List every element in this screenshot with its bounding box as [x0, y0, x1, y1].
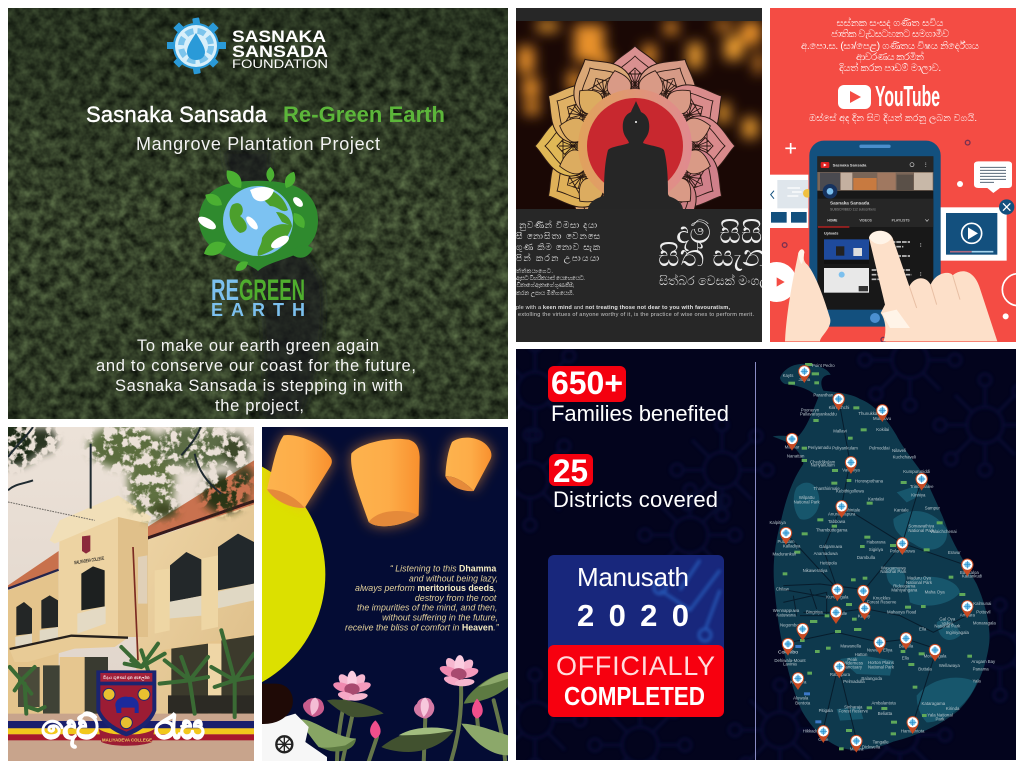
heading [659, 219, 762, 271]
quote: and without being lazy, [409, 573, 498, 583]
icon: Re-Green Earth globe emblem [196, 166, 318, 273]
panel background [516, 349, 1016, 760]
english translation: ple with a keen mind and not treating those not dear to you with favouratism, [516, 305, 730, 311]
place labels: Somawathiya [908, 524, 935, 529]
place labels: Inginiyagala [946, 630, 969, 635]
icon: YouTube logo: YouTube [875, 81, 940, 113]
icon: YouTube logo [838, 85, 940, 109]
icon: dharma wheel [276, 736, 292, 752]
place labels: Tabbowa [828, 519, 846, 524]
place labels: Maduru Oya [907, 576, 931, 581]
place labels: Forest Reserve [867, 600, 897, 605]
tree canopy [0, 420, 253, 520]
place labels: Mahiyangana [891, 587, 918, 592]
place labels: Negombo [780, 623, 799, 628]
national parks [794, 483, 977, 722]
place labels: Monaragala [924, 653, 947, 658]
place labels: Thambuttegama [816, 527, 848, 532]
icon: play bubble [770, 262, 794, 302]
place labels: National Park [794, 499, 820, 504]
place labels: Pelmadulla [843, 679, 865, 684]
verse translation: ත්ත්කයාගෙට. [516, 268, 553, 275]
college crest: විද්‍යා ගුණෝ දාන ආලෝක [103, 675, 151, 681]
verse text: ගුණ කිම නොව සැක [516, 242, 601, 252]
place labels: Galgamuwa [819, 544, 843, 549]
palms and plants [10, 630, 254, 717]
phone: SUBSCRIBED 112 subscribers [830, 208, 876, 212]
badge: Manusath 2020: 2020 [577, 598, 689, 633]
place labels: Neriyakulam [811, 462, 835, 467]
icon: water-drop wheel [167, 17, 226, 74]
place labels: Kalladiya [783, 544, 801, 549]
sinhala intro text: ආවරණය කරමින් [856, 50, 924, 63]
place labels: Habarana [866, 540, 886, 545]
college crest: MALIYADEVA COLLEGE [102, 738, 153, 744]
place labels: Rideegama [893, 584, 916, 589]
title: Sasnaka Sansada [86, 102, 268, 127]
flag band [8, 721, 255, 740]
badge: officially completed: OFFICIALLY [556, 651, 715, 681]
place labels: Maha Oya [925, 590, 945, 595]
monk head and robe [259, 684, 327, 761]
panel background [770, 8, 1016, 342]
verse text: පින් කරන උපායයා [516, 253, 599, 264]
place labels: Knuckles [873, 595, 890, 600]
place labels: Sanctuary [843, 664, 863, 669]
title text: රැස [155, 710, 205, 747]
quote [345, 563, 500, 632]
place labels: Wilpattu [799, 495, 815, 500]
place labels: Yala National [927, 713, 953, 718]
stat: 25 districts [549, 453, 718, 512]
place labels: Nilaveli [892, 448, 906, 453]
place labels: Kinniya [911, 492, 926, 497]
place labels: Kalpitiya [769, 520, 786, 525]
Buddha silhouette [588, 101, 683, 209]
urna dot [635, 121, 637, 123]
place labels: Mallavi [833, 428, 847, 433]
place labels: Kataragama [922, 701, 946, 706]
verse text [516, 220, 601, 264]
yellow disc [79, 451, 325, 698]
logo wordmark: SANSADA [232, 43, 328, 61]
phone: Sasnaka Sansada [830, 201, 870, 206]
place labels: Pallavarayankaddu [800, 411, 837, 416]
body text: To make our earth green again [137, 337, 379, 355]
place labels: Anuradhapura [828, 512, 856, 517]
body text: the project, [215, 397, 304, 415]
badge: officially completed: COMPLETED [564, 681, 705, 711]
place labels: National Park [906, 580, 933, 585]
english translation [516, 305, 754, 318]
college sign: MALIYADEVA COLLEGE [74, 556, 105, 566]
place labels: Kalmunai [973, 601, 991, 606]
place labels: Galle [818, 737, 829, 742]
phone: Sasnaka Sansada [833, 163, 867, 168]
college crest [96, 670, 156, 746]
place labels: Wilderness [842, 661, 863, 666]
subtitle: Mangrove Plantation Project [136, 134, 380, 154]
place labels: Ampara [960, 613, 976, 618]
place labels: Gal Oya [939, 617, 956, 622]
english translation: extolling the virtues of anyone worthy of it, is the practice of wise ones to perform merit. [518, 312, 754, 318]
place labels: Hikkaduwa [803, 728, 825, 733]
logo text: RE GREEN EARTH [212, 279, 304, 316]
verse translation: ඩිතාගේ ඇතාගේ ගුණ කිම, [517, 282, 575, 289]
place labels: Beliatta [878, 711, 893, 716]
place labels: Hatton [855, 652, 868, 657]
verse text: නුවණින් විමසා දයා [519, 220, 597, 231]
place labels: Katuwana [776, 613, 796, 618]
place labels: Panama [973, 667, 989, 672]
panel: Dhamma quote with lanterns [79, 427, 508, 764]
place labels: Polonnaruwa [890, 549, 916, 554]
phone: PLAYLISTS [892, 218, 910, 222]
sky [8, 427, 255, 761]
place labels: Horowpothana [855, 478, 884, 483]
place labels: Batticaloa [960, 570, 979, 575]
place labels: Forest Reserve [839, 709, 869, 714]
place labels: Kumpurupiddi [903, 469, 930, 474]
place labels: Kebithigollewa [836, 489, 865, 494]
place labels: Kuchchaveli [893, 455, 916, 460]
sinhala channel text: ඔස්සේ අද දින සිට දියත් කරනු ලබන වගයි. [809, 111, 977, 124]
body text [96, 337, 416, 415]
logo text: RE GREEN EARTH: RE [211, 274, 239, 307]
map of Sri Lanka [769, 363, 996, 753]
verse text: සී නොසිතා වෙනසෙ [516, 231, 601, 241]
place labels: National Park [880, 569, 907, 574]
place labels: Ella [902, 656, 910, 661]
blurred lantern photo [516, 21, 762, 209]
badge: Manusath 2020 [548, 555, 724, 655]
place labels: Yala [972, 679, 981, 684]
quote: “ Listening to this Dhamma [390, 563, 496, 573]
phone: VIDEOS [859, 218, 873, 222]
place labels: Dambulla [857, 555, 876, 560]
place labels: Kirinda [946, 706, 960, 711]
place labels: Arugam Bay [971, 659, 996, 664]
forest aerial photo background [8, 8, 508, 419]
panel: Re-Green Earth mangrove project [8, 8, 508, 419]
place labels: Thanthirimale [814, 486, 840, 491]
place labels: Trincomalee [910, 484, 934, 489]
place labels: Kattankudi [962, 574, 982, 579]
place labels [769, 363, 996, 751]
mandala [534, 46, 736, 209]
logo wordmark [232, 30, 328, 68]
place labels: Kurunegala [826, 595, 849, 600]
hands [785, 231, 997, 341]
place labels: Valaichchenai [930, 529, 957, 534]
place labels: Wellawaya [939, 663, 960, 668]
place labels: Puttalam [777, 539, 795, 544]
badge: Manusath 2020: Manusath [577, 562, 689, 592]
place labels: Pooneryn [801, 408, 820, 413]
sinhala intro text: සස්නක සංසද ගණිත සවිය [836, 16, 944, 29]
panel background [516, 8, 762, 342]
place labels: Matara [850, 746, 864, 751]
place labels: Horton Plains [868, 660, 894, 665]
location pins [780, 365, 973, 753]
sky lanterns [267, 435, 491, 526]
phone: HOME [827, 218, 838, 222]
place labels: Kalutara [790, 679, 807, 684]
place labels: Badulla [899, 643, 914, 648]
place labels: Aluwala [793, 695, 809, 700]
place labels: Peak [847, 657, 858, 662]
card: left weather card [770, 174, 810, 228]
quote: without suffering in the future, [382, 613, 498, 623]
place labels: Eravur [948, 550, 961, 555]
place labels: Nikaweratiya [803, 568, 828, 573]
place labels: Ratnapura [830, 672, 851, 677]
place labels: Ella [919, 626, 927, 631]
place labels: Madurankuli [773, 552, 796, 557]
place labels: Pulmoddai [869, 446, 890, 451]
card: video player [937, 199, 1014, 261]
title text: දෙව් [41, 710, 99, 749]
body text: and to conserve our coast for the future, [96, 357, 416, 375]
place labels: Mannar [785, 444, 800, 449]
quote: receive the bliss of comfort in Heaven.” [345, 622, 500, 632]
place labels: Kokilai [876, 427, 889, 432]
place labels: Ambalantota [872, 701, 896, 706]
sinhala intro text: ජාතික වැඩසටහනට සමගාමීව [831, 29, 949, 40]
ground [8, 714, 255, 761]
place labels: National Park [908, 528, 935, 533]
heading: දම් සිසිල් [676, 217, 785, 251]
place labels: Periyamadu [808, 445, 831, 450]
sub-heading: සිත්බර වෙසක් මංගල්‍යයක් [659, 273, 795, 289]
panel: Dharma Vesak greeting [516, 8, 762, 342]
virus background decoration [516, 349, 1016, 760]
place labels: Kegalle [833, 611, 848, 616]
panel: YouTube lessons [757, 8, 1024, 342]
stat: 25 districts: 25 [553, 453, 588, 489]
panel background [262, 427, 508, 761]
place labels: Pottuvil [976, 609, 990, 614]
building [8, 460, 254, 720]
place labels: Balangoda [861, 676, 883, 681]
island landmass [773, 364, 990, 750]
place labels: Kilinochchi [829, 405, 849, 410]
body text: Sasnaka Sansada is stepping in with [115, 377, 403, 395]
panel: Maliyadeva College [0, 420, 255, 761]
logo: Sasnaka Sansada Foundation [167, 17, 328, 74]
place labels: Mihintale [843, 507, 861, 512]
badge: officially completed [548, 645, 724, 717]
place labels: Park [936, 716, 945, 721]
quote: destroy from the root [415, 593, 497, 603]
sinhala intro text [801, 16, 979, 74]
stat: 650+ families: Families benefited [551, 401, 729, 426]
place labels: Anamaduwa [814, 551, 838, 556]
place labels: Wennappuwa [773, 608, 800, 613]
place labels: Bingiriya [806, 609, 823, 614]
stat: 650+ families: 650+ [551, 365, 623, 401]
lotus plants [299, 654, 508, 764]
sinhala intro text: දියත් කරන පාඩම් මාලාව. [839, 61, 941, 74]
divider [754, 362, 756, 760]
place labels: Kayts [783, 373, 793, 378]
sinhala intro text: අ.පො.ස. (සා/පෙළ) ගණිතය විෂය නිර්දේශය [801, 39, 979, 52]
place labels: Thunukkai [858, 411, 878, 416]
title [86, 106, 444, 122]
place labels: Lavinia [783, 662, 797, 667]
place labels: National Park [934, 624, 961, 629]
place labels: Hettipola [820, 560, 837, 565]
stat: 650+ families [548, 365, 729, 426]
phone: Uploads [824, 232, 838, 236]
logo text: RE GREEN EARTH: EARTH [211, 300, 305, 320]
quote: the impurities of the mind, and then, [357, 603, 497, 613]
place labels: Sinharaja [844, 705, 863, 710]
road network [780, 399, 967, 741]
place labels: Hambantota [901, 728, 925, 733]
verse translation: කරන උපාය මිතිගයෙහි. [516, 290, 574, 297]
place labels: Jaffna [798, 377, 811, 382]
place labels: Vavuniya [842, 468, 860, 473]
place labels: Mullaitivu [873, 416, 892, 421]
place labels: Kantale [894, 508, 909, 513]
place labels: Sigiriya [869, 547, 884, 552]
logo wordmark: FOUNDATION [232, 57, 328, 71]
place labels: Colombo [778, 650, 798, 656]
panel: Manusath 2020 [479, 309, 1024, 768]
place labels: Dickwella [862, 745, 881, 750]
speech bubble [974, 161, 1012, 193]
place labels: Cheddikulam [810, 459, 836, 464]
college sign [74, 535, 105, 566]
place labels: Dehiwala-Mount [774, 658, 806, 663]
logo wordmark: SASNAKA [232, 28, 326, 46]
logo text: RE GREEN EARTH: GREEN [239, 274, 305, 307]
stat: 25 districts: Districts covered [553, 487, 718, 512]
place labels: Pitigala [819, 708, 833, 713]
place labels: Nuwara Eliya [867, 648, 893, 653]
heading: සිත් සැනසේ [658, 240, 809, 273]
phone [809, 141, 941, 327]
road markers [783, 363, 972, 750]
place labels: Sampur [925, 506, 940, 511]
place labels: Mahaoya Road [887, 609, 917, 614]
decorative dots [782, 140, 1024, 342]
place labels: Puliyankulam [832, 445, 858, 450]
place labels: Chilaw [776, 587, 790, 592]
place labels: Mawanella [840, 644, 862, 649]
place labels: Tangalle [873, 740, 889, 745]
title text [41, 710, 205, 749]
place labels: Buttala [918, 667, 932, 672]
place labels: Kantalai [868, 496, 884, 501]
place labels: Bentota [795, 701, 811, 706]
place labels: Wasgamuwa [881, 565, 906, 570]
quote: always perform meritorious deeds, [355, 583, 496, 593]
title: Re-Green Earth [283, 102, 445, 127]
place labels: National Park [868, 664, 895, 669]
place labels: Point Pedro [812, 363, 835, 368]
place labels: Valley [942, 621, 954, 626]
verse translation [516, 268, 585, 297]
place labels: Paranthan [813, 392, 834, 397]
place labels: Kandy [858, 614, 871, 619]
place labels: Monaragala [973, 621, 996, 626]
place labels: Nanattan [787, 453, 805, 458]
verse translation: ඇසට විහරිකයාස් යෙහෙයෙට. [516, 274, 585, 282]
